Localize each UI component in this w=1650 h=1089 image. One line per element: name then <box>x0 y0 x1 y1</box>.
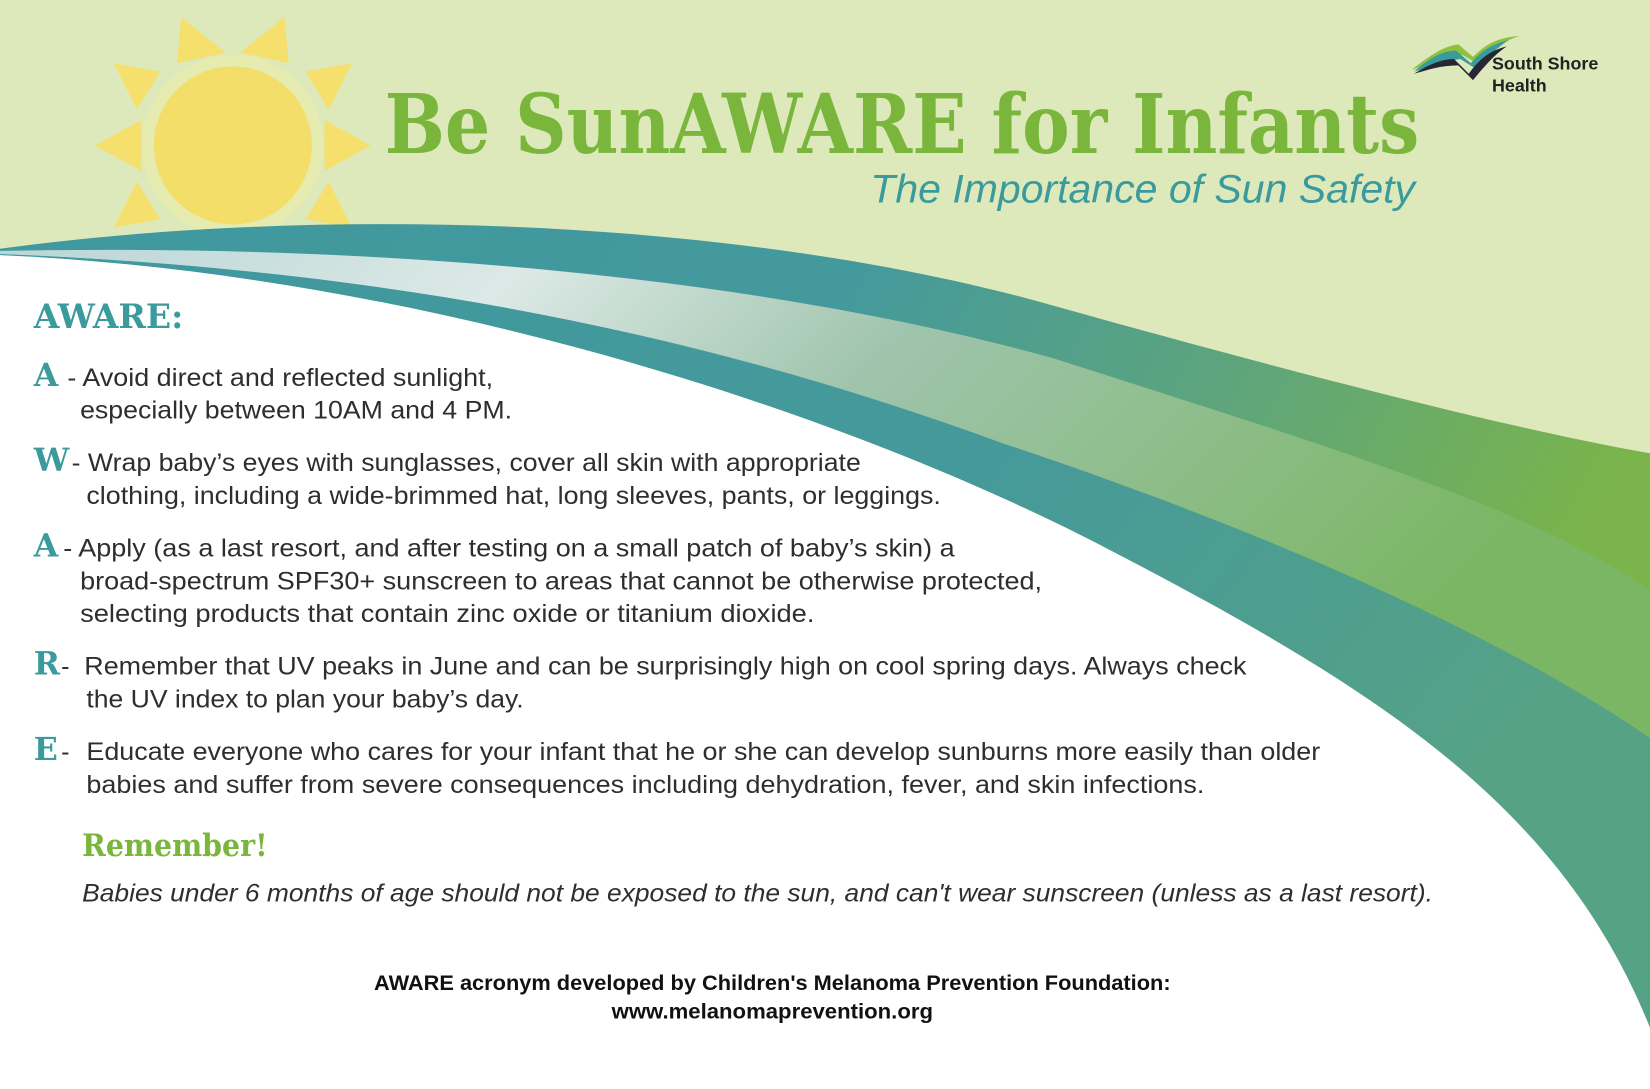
item A2: - Apply (as a last resort, and after testing on a small patch of baby’s skin) a <box>63 535 956 563</box>
logo: Health <box>1492 76 1547 96</box>
item E <box>34 731 1320 799</box>
item R: - <box>61 653 70 681</box>
item A2: selecting products that contain zinc oxide or titanium dioxide. <box>80 600 814 628</box>
item R <box>34 646 1247 713</box>
subtitle: The Importance of Sun Safety <box>870 167 1418 211</box>
logo <box>1412 36 1598 96</box>
item R: the UV index to plan your baby’s day. <box>86 685 524 713</box>
item E: - <box>61 738 70 766</box>
item W: W <box>33 442 70 479</box>
item A2 <box>33 528 1042 628</box>
item W: - Wrap baby’s eyes with sunglasses, cover all skin with appropriate <box>72 449 861 477</box>
item R: Remember that UV peaks in June and can be surprisingly high on cool spring days. Always check <box>84 653 1247 681</box>
logo: South Shore <box>1492 54 1598 74</box>
item W <box>33 442 941 510</box>
item E: Educate everyone who cares for your infant that he or she can develop sunburns more easily than older <box>86 738 1320 766</box>
footer: AWARE acronym developed by Children's Melanoma Prevention Foundation: <box>374 972 1171 995</box>
item E: babies and suffer from severe consequences including dehydration, fever, and skin infections. <box>86 771 1204 799</box>
item E: E <box>34 731 58 768</box>
icon: sun <box>95 17 371 236</box>
title: Be SunAWARE for Infants <box>385 77 1419 173</box>
item A2: broad-spectrum SPF30+ sunscreen to areas that cannot be otherwise protected, <box>80 567 1042 595</box>
item A2: A <box>33 528 59 565</box>
footer <box>374 972 1171 1023</box>
footer: www.melanomaprevention.org <box>611 1000 933 1023</box>
item A: - Avoid direct and reflected sunlight, <box>67 364 493 392</box>
callout: remember: Remember! <box>82 828 268 864</box>
item A: especially between 10AM and 4 PM. <box>80 397 512 425</box>
callout: remember: Babies under 6 months of age should not be exposed to the sun, and can't wear sunscreen (unless as a last resort). <box>82 879 1433 907</box>
swoosh band <box>0 224 1650 1089</box>
callout: remember <box>82 828 1433 907</box>
item A <box>33 357 512 425</box>
item A: A <box>33 357 59 394</box>
item W: clothing, including a wide-brimmed hat, long sleeves, pants, or leggings. <box>86 482 941 510</box>
item R: R <box>34 646 61 683</box>
heading: AWARE: AWARE: <box>33 296 183 336</box>
